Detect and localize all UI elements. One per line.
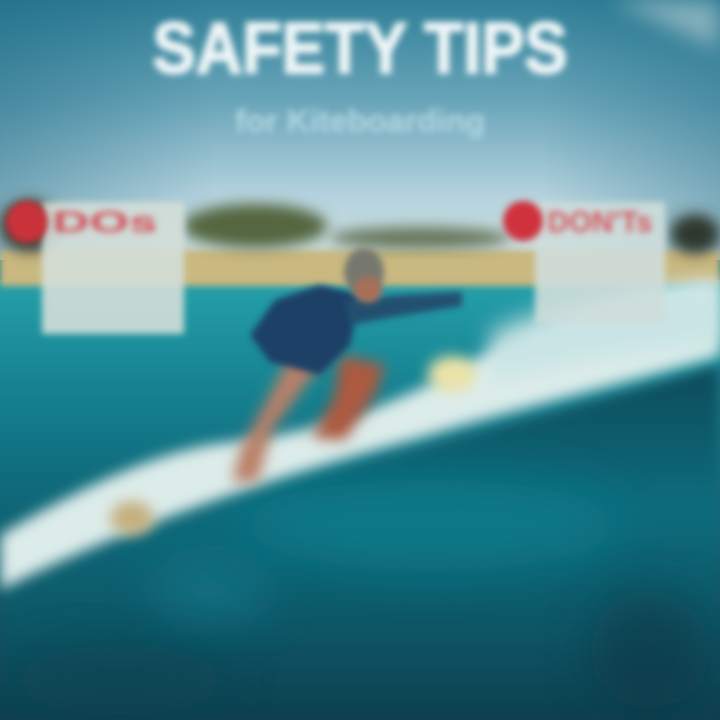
panel: right tips <box>503 201 665 324</box>
background: tree line and beach <box>0 200 720 286</box>
icon: right red circle <box>503 201 543 241</box>
icon: left red circle <box>6 201 48 243</box>
background: deep foreground wave <box>0 365 720 720</box>
right panel heading: DON'Ts <box>548 206 652 239</box>
arm <box>345 292 462 325</box>
wave foam crest <box>0 280 720 590</box>
title: SAFETY TIPS <box>152 9 568 89</box>
legs <box>232 345 320 482</box>
subtitle: for Kiteboarding <box>235 103 485 139</box>
board glow <box>428 356 476 392</box>
head <box>344 248 384 296</box>
surfer figure <box>232 248 476 482</box>
torso and shorts <box>250 285 360 375</box>
background: sky <box>0 0 720 260</box>
left panel heading: DOs <box>52 206 158 239</box>
panel: left tips <box>6 201 184 334</box>
background: turquoise water <box>0 280 720 720</box>
